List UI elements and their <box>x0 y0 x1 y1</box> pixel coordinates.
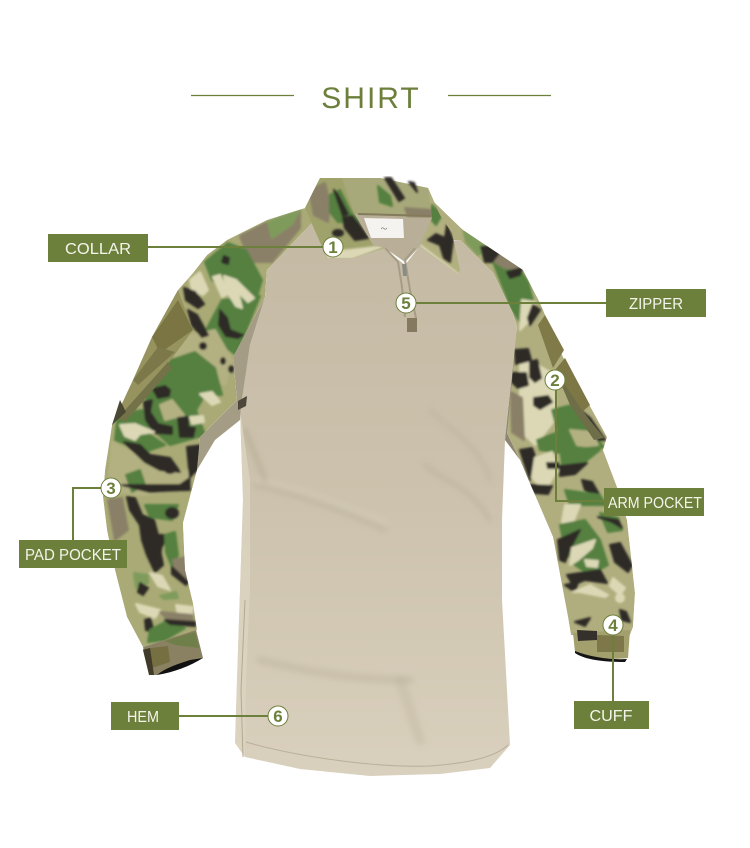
left sleeve camo <box>103 208 313 647</box>
underarm panel left <box>197 297 265 470</box>
callout 3: pad pocket: 3 <box>106 479 116 498</box>
zipper and placket <box>385 248 417 332</box>
callout 4: cuff <box>574 615 649 729</box>
body fold shading <box>235 416 422 756</box>
shirt body <box>235 222 517 776</box>
neck label: 〜 <box>380 226 388 233</box>
callout 2: arm pocket <box>545 370 704 516</box>
callout 5: zipper: 5 <box>401 294 411 313</box>
neck label <box>364 218 404 238</box>
callout 6: hem: 6 <box>273 707 283 726</box>
callout 6: hem: HEM <box>127 709 159 726</box>
left cuff <box>143 630 203 675</box>
callout 5: zipper: ZIPPER <box>629 296 683 313</box>
title: SHIRT <box>321 82 421 115</box>
callout 1: collar: COLLAR <box>65 241 131 258</box>
callout 1: collar: 1 <box>328 238 338 257</box>
collar backing <box>305 178 454 262</box>
callout 1: collar <box>48 234 343 262</box>
right collar flap <box>420 188 460 274</box>
callout 4: cuff: CUFF <box>590 708 633 725</box>
right sleeve pocket and velcro patch <box>538 315 604 440</box>
callout 5: zipper <box>396 289 706 317</box>
callout 6: hem <box>111 702 288 730</box>
side seam highlight <box>235 410 250 757</box>
right cuff <box>573 630 630 662</box>
right sleeve camo <box>432 200 635 640</box>
collar <box>305 176 460 274</box>
callout 2: arm pocket: ARM POCKET <box>608 495 702 512</box>
callout 4: cuff: 4 <box>608 616 618 635</box>
inner neck <box>354 214 432 262</box>
callout 3: pad pocket: PAD POCKET <box>25 547 121 564</box>
shirt illustration <box>103 175 635 776</box>
callout 2: arm pocket: 2 <box>550 371 560 390</box>
hem stitching <box>246 742 508 766</box>
underarm panel right <box>505 327 520 460</box>
left sleeve pocket and velcro patch <box>112 290 193 425</box>
callout 3: pad pocket <box>19 478 127 568</box>
back collar band <box>320 178 433 218</box>
left collar flap <box>305 178 384 258</box>
